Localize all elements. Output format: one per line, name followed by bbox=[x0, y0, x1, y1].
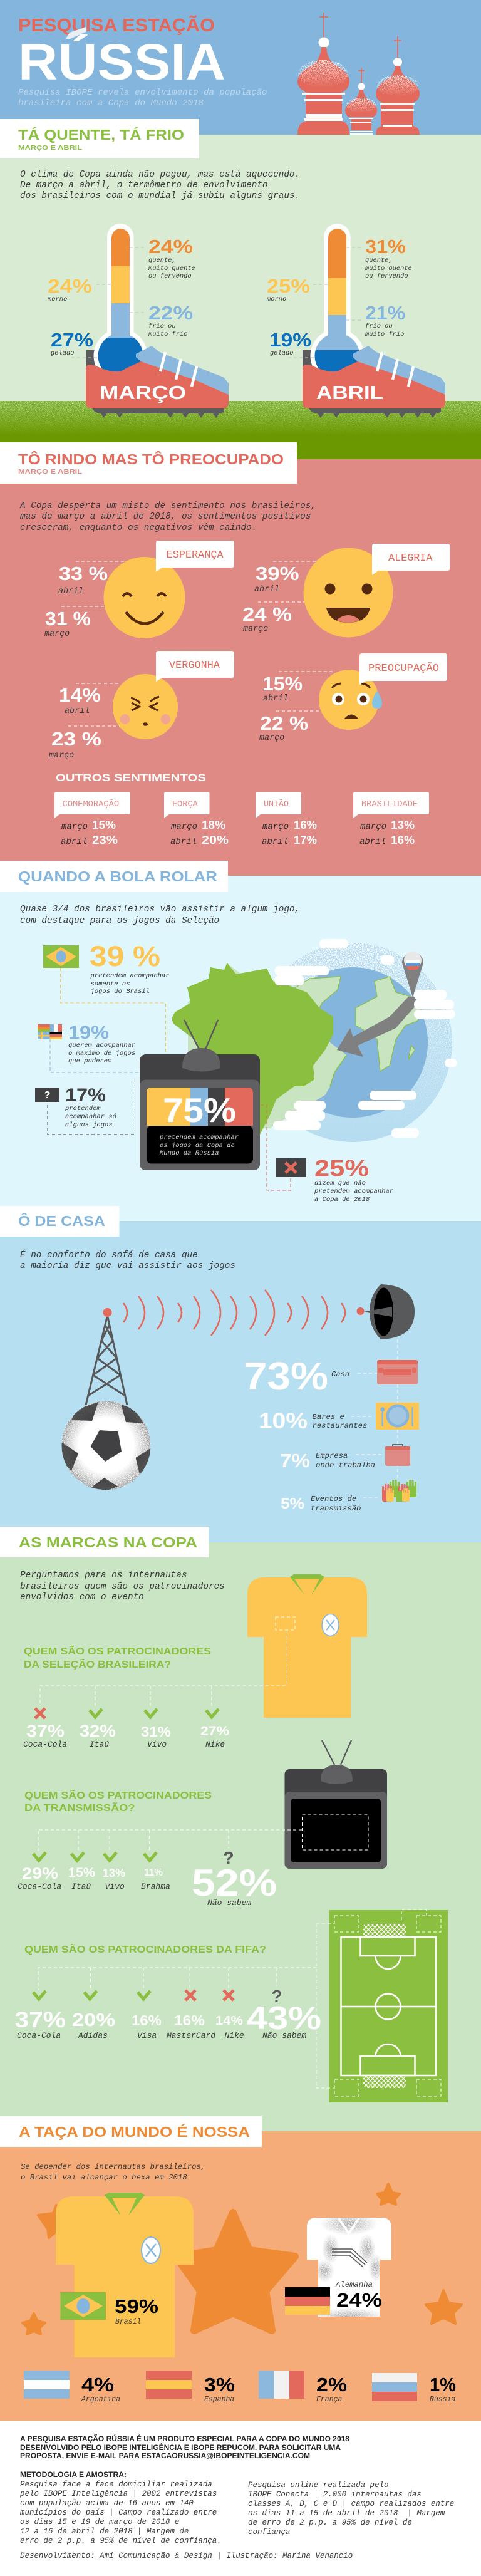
intro text bbox=[20, 1249, 235, 1271]
fifa connector lines bbox=[38, 1968, 316, 1990]
stars bbox=[23, 2184, 462, 2334]
results: transmissão: 13% bbox=[103, 1867, 125, 1879]
location: casa: Casa bbox=[331, 1370, 349, 1379]
results: fifa: 14% bbox=[215, 2014, 243, 2028]
results: fifa: Adidas bbox=[78, 2031, 108, 2040]
location: empresa: Empresa bbox=[316, 1452, 348, 1460]
tv: Mundo da Rússia bbox=[160, 1150, 219, 1157]
emoji: preocupação: 22 % bbox=[260, 712, 308, 734]
location: empresa: 7% bbox=[280, 1450, 310, 1472]
location: bares e restaurantes bbox=[259, 1403, 419, 1433]
other feeling: brasilidade: março bbox=[360, 822, 386, 832]
intro text bbox=[20, 905, 300, 926]
stat: 19% as many as possible: o máximo de jogos bbox=[68, 1050, 135, 1057]
methodology column 1: erro de 2 p.p. a 95% de nível de confiança. bbox=[20, 2537, 222, 2545]
panel: as marcas na copa bbox=[0, 1527, 481, 2131]
stat: 25% will not watch: pretendem acompanhar bbox=[314, 1188, 393, 1195]
icon: brazil shirt bbox=[247, 1574, 367, 1718]
heading banner: TÔ RINDO MAS TÔ PREOCUPADO bbox=[18, 450, 284, 467]
location: eventos de transmissão: 5% bbox=[281, 1495, 304, 1512]
thermometer and boot: março: 24% bbox=[148, 236, 193, 257]
emoji: vergonha: 23 % bbox=[51, 728, 101, 750]
stat: 39% brazil only: somente os bbox=[90, 980, 130, 988]
map shadow bbox=[188, 965, 346, 1128]
signal waves bbox=[123, 1290, 345, 1336]
methodology column 2: classes A, B, C e D | campo realizados entre bbox=[248, 2500, 454, 2508]
emoji: alegria: ALEGRIA bbox=[388, 553, 433, 564]
thermometer and boot: março: muito frio bbox=[148, 331, 187, 338]
location: casa bbox=[244, 1355, 418, 1398]
stat: 39% brazil only: 39 % bbox=[90, 940, 160, 972]
thermometer and boot: março: gelado bbox=[51, 350, 74, 357]
connector lines bbox=[48, 968, 291, 1190]
other feeling: brasilidade: 16% bbox=[391, 834, 415, 846]
thermometer and boot: abril bbox=[267, 224, 445, 418]
results: seleção: Vivo bbox=[147, 1740, 167, 1749]
intro text: De março a abril, o termômetro de envolvimento bbox=[20, 180, 268, 190]
coast line bbox=[330, 1055, 347, 1086]
results: transmissão: Coca-Cola bbox=[18, 1882, 61, 1891]
heading banner bbox=[0, 442, 297, 484]
thermometer and boot: março: 27% bbox=[51, 329, 93, 351]
tv: pretendem acompanhar bbox=[159, 1134, 239, 1141]
stat: 19% as many as possible: que puderem bbox=[68, 1057, 112, 1065]
question: seleção: QUEM SÃO OS PATROCINADORES bbox=[24, 1644, 211, 1657]
intro text: brasileiros quem são os patrocinadores bbox=[20, 1582, 225, 1592]
stat: 17% a few games: 17% bbox=[65, 1085, 106, 1106]
stat: 17% a few games: pretendem bbox=[65, 1105, 101, 1113]
panel: a taça do mundo é nossa bbox=[0, 2116, 481, 2421]
results: seleção: Nike bbox=[205, 1740, 225, 1749]
stat: 17% a few games bbox=[35, 1085, 116, 1129]
stat: 19% as many as possible bbox=[38, 1022, 135, 1065]
thermometer and boot: março: 24% bbox=[48, 275, 92, 297]
methodology column 1 bbox=[19, 2480, 222, 2545]
heading banner bbox=[0, 119, 199, 158]
stat: 39% brazil only: pretendem acompanhar bbox=[90, 972, 170, 980]
other feeling: brasilidade: 13% bbox=[391, 819, 415, 831]
heading banner: AS MARCAS NA COPA bbox=[19, 1534, 197, 1550]
other feeling: brasilidade: abril bbox=[359, 837, 386, 847]
other feeling: força: março bbox=[171, 822, 197, 832]
methodology column 1: municípios do país | Campo realizado entre bbox=[20, 2508, 217, 2517]
map of brazil bbox=[172, 963, 333, 1144]
question: seleção: DA SELEÇÃO BRASILEIRA? bbox=[24, 1658, 171, 1670]
sponsor connector lines bbox=[40, 1617, 295, 1706]
other feeling: comemoração: 15% bbox=[92, 819, 116, 831]
tv: 75% bbox=[163, 1091, 236, 1130]
emoji: vergonha bbox=[49, 651, 234, 761]
thermometer and boot: abril: ou fervendo bbox=[365, 273, 408, 280]
emoji: esperança: março bbox=[44, 630, 70, 639]
location: empresa bbox=[280, 1445, 410, 1472]
globe illustration bbox=[172, 939, 457, 1144]
heading banner bbox=[0, 1527, 209, 1557]
emoji: preocupação: março bbox=[259, 734, 284, 743]
results: fifa: 37% bbox=[15, 2008, 66, 2032]
stat: 39% brazil only: jogos do Brasil bbox=[90, 988, 150, 995]
results: transmissão: 29% bbox=[22, 1865, 58, 1883]
grass bbox=[0, 401, 481, 460]
stat: 25% will not watch: 25% bbox=[314, 1155, 369, 1182]
question: transmissão bbox=[24, 1789, 212, 1814]
question: seleção bbox=[24, 1644, 211, 1670]
thermometer and boot: abril: morno bbox=[267, 296, 286, 303]
emoji: alegria: 24 % bbox=[242, 603, 292, 625]
stat: 19% as many as possible: querem acompanhar bbox=[68, 1042, 135, 1049]
heading banner: MARÇO E ABRIL bbox=[18, 469, 82, 475]
emoji: esperança: abril bbox=[58, 587, 83, 596]
emoji: preocupação: abril bbox=[263, 694, 288, 704]
results: fifa: Visa bbox=[137, 2031, 157, 2040]
results: fifa: 16% bbox=[132, 2012, 162, 2028]
thermometer and boot: abril: 19% bbox=[269, 329, 311, 351]
product note bbox=[20, 2435, 350, 2460]
stat: 17% a few games: acompanhar só bbox=[65, 1113, 116, 1121]
stat: argentina 4%: Argentina bbox=[81, 2396, 120, 2404]
intro text: A Copa desperta um misto de sentimento nos brasileiros, bbox=[19, 501, 316, 511]
methodology column 2 bbox=[248, 2481, 454, 2537]
results: fifa: Nike bbox=[224, 2031, 244, 2040]
emoji: esperança bbox=[44, 541, 234, 639]
other feeling: brasilidade: BRASILIDADE bbox=[361, 799, 418, 809]
stat: rússia 1%: 1% bbox=[430, 2374, 456, 2396]
title: rússia: RÚSSIA bbox=[18, 34, 225, 91]
question: transmissão: QUEM SÃO OS PATROCINADORES bbox=[24, 1789, 212, 1801]
product note: DESENVOLVIDO PELO IBOPE INTELIGÊNCIA E IBOPE REPUCOM. PARA SOLICITAR UMA bbox=[20, 2444, 341, 2452]
intro text: É no conforto do sofá de casa que bbox=[20, 1249, 198, 1260]
location: eventos de transmissão bbox=[281, 1480, 416, 1513]
intro text: o Brasil vai alcançar o hexa em 2018 bbox=[21, 2173, 187, 2182]
panel: quando a bola rolar bbox=[0, 861, 481, 1222]
title: pesquisa estação: PESQUISA ESTAÇÃO bbox=[18, 14, 215, 36]
stat: alemanha 24%: Alemanha bbox=[335, 2280, 373, 2289]
antenna tower bbox=[86, 1308, 127, 1405]
emoji: esperança: 33 % bbox=[59, 563, 108, 584]
emoji: preocupação: PREOCUPAÇÃO bbox=[368, 662, 439, 675]
panel: o de casa bbox=[0, 1206, 481, 1542]
icon: russian domes bbox=[297, 13, 420, 135]
methodology column 2: IBOPE Conecta | 2.000 internautas das bbox=[248, 2490, 422, 2499]
thermometer and boot: março: quente, bbox=[148, 257, 176, 264]
stat: 19% as many as possible: 19% bbox=[68, 1022, 109, 1043]
emoji: vergonha: abril bbox=[65, 707, 90, 716]
stat: rússia 1% bbox=[372, 2373, 456, 2404]
other feeling: união: março bbox=[262, 822, 289, 832]
methodology heading: METODOLOGIA E AMOSTRA: bbox=[20, 2471, 127, 2479]
arrow bbox=[337, 997, 416, 1057]
stat: 25% will not watch bbox=[276, 1155, 393, 1203]
thermometer and boot: março: frio ou bbox=[148, 323, 176, 330]
stat: 25% will not watch: dizem que não bbox=[314, 1180, 366, 1187]
results: fifa: MasterCard bbox=[167, 2031, 215, 2040]
thermometer and boot: abril: 21% bbox=[365, 302, 405, 324]
results: seleção: 27% bbox=[200, 1724, 229, 1738]
thermometer and boot: março bbox=[48, 224, 229, 418]
results: seleção: 32% bbox=[80, 1722, 116, 1740]
methodology column 2: confiança bbox=[248, 2528, 290, 2537]
location: empresa: onde trabalha bbox=[316, 1461, 375, 1470]
stat: 17% a few games: alguns jogos bbox=[65, 1121, 113, 1129]
other feeling: força: 20% bbox=[202, 834, 229, 846]
results: transmissão: Itaú bbox=[71, 1882, 91, 1891]
results: fifa: 20% bbox=[72, 2010, 115, 2030]
results: fifa: ? bbox=[271, 1987, 282, 2006]
product note: A PESQUISA ESTAÇÃO RÚSSIA É UM PRODUTO ESPECIAL PARA A COPA DO MUNDO 2018 bbox=[20, 2435, 350, 2443]
intro text: Perguntamos para os internautas bbox=[20, 1571, 187, 1581]
results: seleção: Itaú bbox=[90, 1740, 109, 1749]
intro text: O clima de Copa ainda não pegou, mas está aquecendo. bbox=[20, 170, 300, 180]
results: fifa bbox=[15, 1987, 321, 2040]
stat: frança 2%: 2% bbox=[316, 2374, 347, 2396]
location: casa: 73% bbox=[244, 1355, 328, 1398]
panel: to rindo mas to preocupado bbox=[0, 442, 481, 876]
accent of rússia bbox=[66, 27, 86, 39]
other feeling: união: 16% bbox=[294, 819, 317, 831]
thermometer and boot: abril: 31% bbox=[365, 236, 406, 257]
results: seleção: 37% bbox=[26, 1722, 65, 1740]
icon: russia pin bbox=[402, 952, 423, 997]
panel: header bbox=[0, 0, 481, 135]
heading banner: Ô DE CASA bbox=[18, 1212, 105, 1229]
stat: 25% will not watch: a Copa de 2018 bbox=[314, 1196, 370, 1203]
methodology column 1: com população acima de 16 anos em 140 bbox=[20, 2499, 194, 2508]
emoji: vergonha: VERGONHA bbox=[169, 660, 220, 672]
thermometer and boot: março: MARÇO bbox=[100, 382, 186, 403]
stat: frança 2% bbox=[259, 2371, 347, 2404]
emoji: preocupação: 15% bbox=[262, 673, 303, 695]
stat: brasil 59%: Brasil bbox=[115, 2318, 141, 2326]
intro text: Quase 3/4 dos brasileiros vão assistir a algum jogo, bbox=[20, 905, 300, 915]
methodology column 2: os dias 11 a 15 de abril de 2018 | Margem bbox=[248, 2509, 445, 2518]
intro text: envolvidos com o evento bbox=[20, 1592, 144, 1602]
other feeling: união: abril bbox=[262, 837, 288, 847]
intro text: dos brasileiros com o mundial já subiu alguns graus. bbox=[20, 191, 300, 201]
thermometer and boot: abril: quente, bbox=[365, 257, 393, 264]
thermometer and boot: março: ou fervendo bbox=[148, 273, 192, 280]
stat: espanha 3%: 3% bbox=[204, 2374, 235, 2396]
methodology column 1: pelo IBOPE Inteligência | 2002 entrevistas bbox=[19, 2490, 217, 2498]
other feeling: brasilidade bbox=[353, 792, 429, 847]
thermometer and boot: abril: 25% bbox=[267, 275, 310, 297]
other feeling: união: 17% bbox=[294, 834, 317, 846]
heading banner bbox=[0, 1206, 119, 1237]
intro text: mas de março a abril de 2018, os sentimentos positivos bbox=[20, 512, 311, 522]
thermometer and boot: março: muito quente bbox=[148, 265, 195, 273]
thermometer and boot: abril: muito frio bbox=[365, 331, 404, 338]
results: transmissão: Não sabem bbox=[207, 1898, 251, 1908]
stat: argentina 4% bbox=[24, 2371, 120, 2404]
emoji: alegria: 39% bbox=[256, 563, 299, 584]
question: transmissão: DA TRANSMISSÃO? bbox=[24, 1801, 135, 1814]
results: fifa: 43% bbox=[247, 2000, 321, 2037]
stat: alemanha 24% bbox=[285, 2280, 382, 2315]
tv: os jogos da Copa do bbox=[160, 1142, 235, 1150]
location: bares e restaurantes: Bares e bbox=[312, 1413, 344, 1421]
results: seleção bbox=[23, 1708, 229, 1749]
question: fifa: QUEM SÃO OS PATROCINADORES DA FIFA? bbox=[24, 1943, 266, 1955]
other feeling: força: FORÇA bbox=[172, 799, 198, 809]
stat: frança 2%: França bbox=[316, 2396, 343, 2404]
results: transmissão: Brahma bbox=[141, 1882, 170, 1891]
emoji: alegria bbox=[242, 544, 450, 638]
results: fifa: Coca-Cola bbox=[17, 2031, 61, 2040]
heading banner: MARÇO E ABRIL bbox=[18, 145, 82, 152]
clouds bbox=[273, 939, 457, 1138]
thermometer and boot: abril: muito quente bbox=[365, 265, 412, 273]
panel: ta quente ta frio bbox=[0, 119, 481, 460]
results: transmissão bbox=[18, 1848, 277, 1908]
heading banner bbox=[0, 861, 228, 892]
emoji: vergonha: 14% bbox=[59, 684, 101, 706]
stat: 39% brazil only bbox=[43, 940, 170, 995]
location: bares e restaurantes: restaurantes bbox=[312, 1421, 367, 1430]
other feeling: união: UNIÃO bbox=[264, 799, 289, 809]
stat: brasil 59%: 59% bbox=[115, 2295, 158, 2317]
football bbox=[61, 1401, 150, 1490]
emoji: preocupação bbox=[259, 653, 447, 743]
other feeling: força: 18% bbox=[202, 819, 225, 831]
methodology column 1: 12 a 16 de abril de 2018 | Margem de bbox=[20, 2527, 189, 2536]
methodology column 1: Pesquisa face a face domiciliar realizada bbox=[20, 2480, 212, 2489]
emoji: esperança: 31 % bbox=[45, 608, 91, 630]
heading: outros sentimentos: OUTROS SENTIMENTOS bbox=[56, 772, 206, 784]
emoji: alegria: março bbox=[243, 625, 268, 634]
location: bares e restaurantes: 10% bbox=[259, 1409, 308, 1433]
tv: transmissão bbox=[284, 1740, 387, 1869]
location: eventos de transmissão: transmissão bbox=[311, 1504, 361, 1513]
heading banner: A TAÇA DO MUNDO É NOSSA bbox=[19, 2123, 250, 2140]
thermometer and boot: abril: ABRIL bbox=[316, 382, 383, 403]
stat: rússia 1%: Rússia bbox=[430, 2396, 456, 2404]
thermometer and boot: março: 22% bbox=[148, 302, 193, 324]
satellite dish bbox=[357, 1284, 415, 1339]
tv bbox=[140, 1020, 260, 1170]
stat: argentina 4%: 4% bbox=[81, 2374, 114, 2396]
methodology column 2: Pesquisa online realizada pelo bbox=[248, 2481, 388, 2490]
product note: PROPOSTA, ENVIE E-MAIL PARA ESTACAORUSSIA@IBOPEINTELIGENCIA.COM bbox=[20, 2453, 310, 2460]
football field bbox=[316, 1909, 448, 2102]
subtitle: brasileira com a Copa do Mundo 2018 bbox=[18, 98, 204, 108]
methodology column 2: de erro de 2 p.p. a 95% de nível de bbox=[248, 2518, 412, 2527]
transmission connector lines bbox=[38, 1815, 368, 1851]
results: transmissão: 52% bbox=[192, 1862, 277, 1904]
other feeling: união bbox=[256, 792, 317, 847]
heading banner: TÁ QUENTE, TÁ FRIO bbox=[18, 126, 184, 143]
stat: espanha 3% bbox=[146, 2371, 235, 2404]
results: fifa: Não sabem bbox=[262, 2031, 306, 2040]
location: eventos de transmissão: Eventos de bbox=[311, 1495, 356, 1504]
intro text bbox=[21, 2163, 205, 2182]
results: transmissão: 15% bbox=[68, 1866, 95, 1880]
thermometer and boot: abril: gelado bbox=[270, 350, 293, 357]
dashed line bbox=[351, 1339, 398, 1498]
thermometer and boot: abril: frio ou bbox=[365, 323, 393, 330]
intro text: cresceram, enquanto os negativos vêm caindo. bbox=[20, 523, 257, 533]
emoji: vergonha: março bbox=[49, 751, 74, 761]
subtitle bbox=[18, 88, 267, 108]
results: seleção: 31% bbox=[141, 1723, 171, 1740]
emoji: esperança: ESPERANÇA bbox=[167, 549, 224, 561]
other feeling: comemoração: COMEMORAÇÃO bbox=[63, 799, 119, 809]
subtitle: Pesquisa IBOPE revela envolvimento da população bbox=[18, 88, 267, 98]
credits: Desenvolvimento: Amí Comunicação & Design | Ilustração: Marina Venancio bbox=[20, 2552, 353, 2560]
stat: alemanha 24%: 24% bbox=[336, 2289, 382, 2311]
other feeling: força bbox=[164, 792, 229, 847]
intro text bbox=[20, 1571, 225, 1602]
stat: espanha 3%: Espanha bbox=[204, 2396, 234, 2404]
other feeling: comemoração: março bbox=[61, 822, 88, 832]
results: transmissão: 11% bbox=[144, 1867, 163, 1878]
heading banner bbox=[0, 2116, 262, 2147]
intro text: Se depender dos internautas brasileiros, bbox=[21, 2163, 205, 2171]
stat: brasil 59% bbox=[60, 2292, 158, 2326]
other feeling: comemoração bbox=[54, 792, 130, 847]
methodology column 1: os dias 15 e 19 de março de 2018 e bbox=[20, 2518, 179, 2527]
heading banner: QUANDO A BOLA ROLAR bbox=[18, 868, 217, 885]
intro text bbox=[19, 501, 316, 533]
stat: 17% a few games: ? bbox=[44, 1090, 50, 1101]
results: seleção: Coca-Cola bbox=[23, 1740, 67, 1749]
other feeling: força: abril bbox=[170, 837, 197, 847]
results: fifa: 16% bbox=[174, 2012, 205, 2028]
emoji: alegria: abril bbox=[254, 585, 279, 595]
other feeling: comemoração: abril bbox=[61, 837, 87, 847]
results: transmissão: Vivo bbox=[105, 1882, 125, 1891]
results: transmissão: ? bbox=[223, 1848, 234, 1867]
icon: germany shirt bbox=[307, 2218, 391, 2317]
thermometer and boot: março: morno bbox=[48, 296, 67, 303]
icon: brazil shirt large bbox=[56, 2193, 194, 2357]
other feeling: comemoração: 23% bbox=[92, 834, 118, 846]
intro text: a maioria diz que vai assistir aos jogos bbox=[20, 1261, 235, 1271]
intro text bbox=[20, 170, 300, 201]
panel: footer bbox=[19, 2435, 454, 2560]
intro text: com destaque para os jogos da Seleção bbox=[20, 916, 219, 926]
